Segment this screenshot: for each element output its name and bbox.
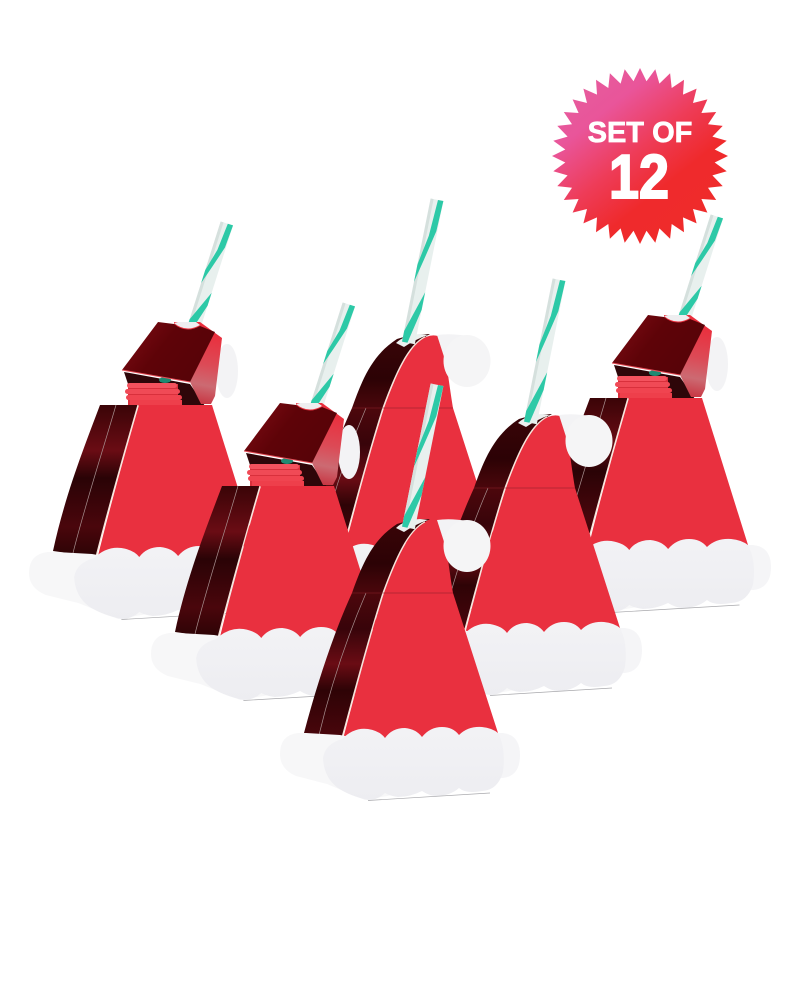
pom-pom	[437, 334, 490, 387]
threaded neck	[247, 464, 304, 487]
tilted lid	[612, 315, 712, 397]
red hat front	[465, 415, 620, 637]
santa hat cup: back left, open lid	[29, 221, 281, 620]
white fur trim	[151, 627, 403, 700]
lid interior	[614, 365, 695, 399]
santa hat cup: middle left, open lid	[151, 302, 403, 700]
striped straw	[402, 383, 443, 529]
pom-pom	[559, 414, 612, 467]
pom-pom	[216, 344, 238, 398]
tilted lid	[122, 322, 222, 404]
striped straw	[524, 278, 565, 424]
red hat body	[97, 405, 258, 560]
pom-pom	[437, 519, 490, 572]
tilted lid	[244, 403, 344, 485]
threaded neck	[615, 376, 672, 399]
white fur trim	[280, 727, 520, 800]
badge: set of 12	[552, 68, 728, 244]
white fur trim	[280, 542, 520, 616]
threaded neck	[125, 383, 182, 406]
white fur trim	[519, 539, 771, 612]
santa hat cup: front centre, closed	[280, 383, 520, 800]
badge text: set of: SET OF	[588, 117, 692, 149]
white fur trim	[402, 622, 642, 696]
white fur trim	[29, 546, 281, 620]
metallic side panel	[175, 486, 260, 638]
red hat body	[219, 486, 380, 641]
santa hat cup: middle right, closed	[402, 278, 642, 696]
lid interior	[246, 453, 327, 487]
metallic side panel	[304, 334, 430, 553]
metallic side panel	[304, 519, 430, 738]
pom-pom	[338, 425, 360, 479]
lid interior	[124, 372, 205, 406]
badge number: 12: 12	[609, 143, 669, 212]
red hat front	[343, 520, 498, 742]
santa hat cup: back right, open lid	[519, 214, 771, 612]
striped straw	[402, 198, 443, 344]
metallic side panel	[53, 405, 138, 557]
santa hat cup: back centre, closed	[280, 198, 520, 616]
striped straw	[187, 221, 233, 331]
metallic side panel	[426, 414, 552, 633]
starburst seal	[552, 68, 728, 244]
striped straw	[309, 302, 355, 412]
red hat front	[343, 335, 498, 557]
red hat body	[587, 398, 748, 553]
pom-pom	[706, 337, 728, 391]
metallic side panel	[543, 398, 628, 550]
striped straw	[677, 214, 723, 324]
